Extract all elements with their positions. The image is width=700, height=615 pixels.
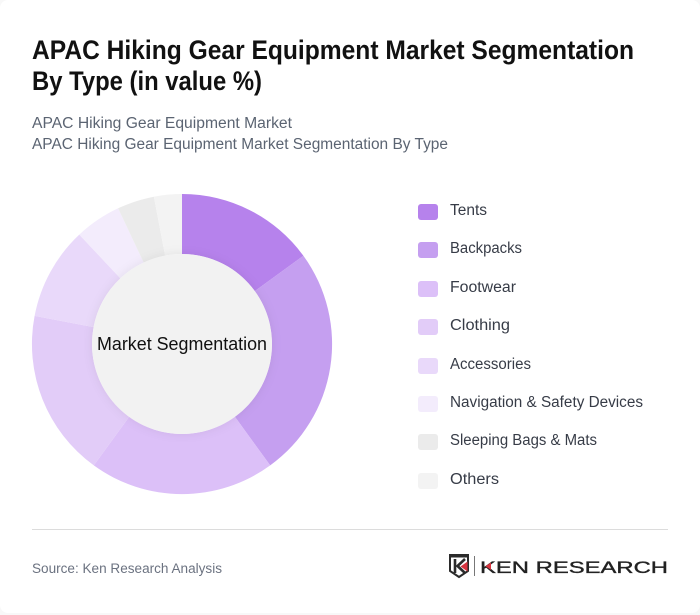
segment: Footwear [94, 417, 270, 494]
segment: Others [154, 194, 182, 256]
centre label: Market Segmentation [97, 334, 267, 354]
legend item: Backpacks [418, 240, 522, 258]
source note: Source: Ken Research Analysis [32, 561, 222, 576]
legend item: Navigation & Safety Devices: Navigation & Safety Devices [450, 394, 643, 411]
donut centre [92, 254, 272, 434]
logo: Ken Research [449, 554, 668, 577]
icon: shield [449, 554, 469, 577]
legend item: Footwear: Footwear [450, 279, 516, 296]
segment: Accessories [35, 235, 120, 327]
legend item: Accessories [418, 356, 531, 374]
legend item: Backpacks: Backpacks [450, 240, 522, 257]
subtitle [32, 115, 448, 153]
subtitle: APAC Hiking Gear Equipment Market Segmentation By Type [32, 136, 448, 153]
title [32, 35, 634, 96]
subtitle: APAC Hiking Gear Equipment Market [32, 115, 293, 132]
donut chart [32, 194, 332, 494]
segment: Tents [182, 194, 303, 291]
legend item: Tents [418, 202, 487, 220]
segment: Sleeping Bags & Mats [118, 197, 165, 263]
icon: red K notch [486, 562, 491, 570]
segment: Clothing [32, 316, 129, 465]
legend item: Clothing [418, 317, 510, 335]
logo wordmark: KEN RESEARCH [480, 558, 668, 577]
legend item: Others [418, 471, 499, 489]
legend item: Footwear [418, 279, 516, 297]
title: By Type (in value %) [32, 66, 262, 96]
legend item: Accessories: Accessories [450, 356, 531, 373]
legend item: Others: Others [450, 471, 499, 488]
title: APAC Hiking Gear Equipment Market Segmentation [32, 35, 634, 65]
legend item: Tents: Tents [450, 202, 487, 219]
segment: Navigation & Safety Devices [79, 208, 144, 278]
legend item: Sleeping Bags & Mats: Sleeping Bags & Mats [450, 432, 597, 449]
legend item: Clothing: Clothing [450, 317, 510, 334]
segment: Backpacks [235, 256, 332, 465]
legend [418, 202, 643, 489]
